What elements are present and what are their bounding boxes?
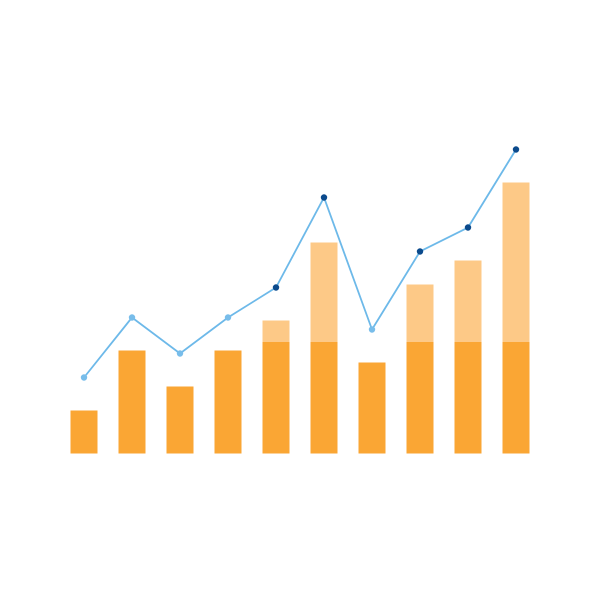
dark data points bbox=[273, 146, 519, 291]
bar 4 bbox=[214, 350, 242, 454]
bar chart bbox=[70, 182, 530, 454]
bar 5 bbox=[262, 320, 290, 454]
bar 8 bbox=[406, 284, 434, 454]
light data points bbox=[81, 314, 375, 381]
bar 2 bbox=[118, 350, 146, 454]
bar 7 bbox=[358, 362, 386, 454]
bar 6 bbox=[310, 242, 338, 454]
bar 9 bbox=[454, 260, 482, 454]
trend line bbox=[84, 150, 516, 378]
bar 3 bbox=[166, 386, 194, 454]
bar 1 bbox=[70, 410, 98, 454]
bar 10 bbox=[502, 182, 530, 454]
